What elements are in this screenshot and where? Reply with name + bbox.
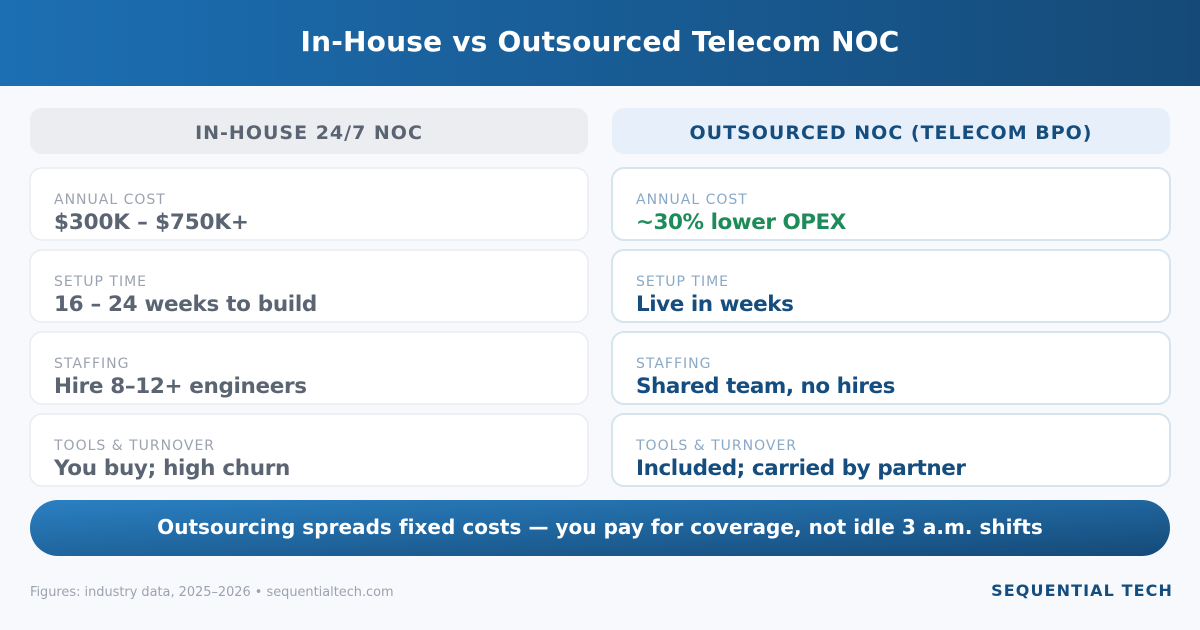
card: outsourced annual cost xyxy=(611,167,1171,241)
card: outsourced staffing: STAFFING xyxy=(636,356,711,372)
title: In-House vs Outsourced Telecom NOC xyxy=(300,25,900,58)
column heading: outsourced: OUTSOURCED NOC (TELECOM BPO) xyxy=(690,122,1092,144)
card: outsourced setup time: Live in weeks xyxy=(636,292,793,317)
card: in-house staffing: STAFFING xyxy=(54,356,129,372)
card: in-house annual cost xyxy=(30,168,588,240)
footer source note: Figures: industry data, 2025–2026 • sequentialtech.com xyxy=(30,585,394,600)
card: in-house tools and turnover: You buy; high churn xyxy=(54,456,290,481)
card: in-house staffing xyxy=(30,332,588,404)
card: outsourced setup time xyxy=(611,249,1171,323)
card: in-house setup time: SETUP TIME xyxy=(54,274,147,290)
card: in-house setup time: 16 – 24 weeks to build xyxy=(54,292,317,317)
card: outsourced staffing xyxy=(611,331,1171,405)
card: outsourced staffing: Shared team, no hires xyxy=(636,374,895,399)
column heading: outsourced xyxy=(612,108,1170,154)
card: in-house annual cost: $300K – $750K+ xyxy=(54,210,249,235)
column heading: in-house: IN-HOUSE 24/7 NOC xyxy=(195,122,423,144)
card: outsourced tools and turnover xyxy=(611,413,1171,487)
card: in-house staffing: Hire 8–12+ engineers xyxy=(54,374,307,399)
card: outsourced tools and turnover: Included; carried by partner xyxy=(636,456,966,481)
card: in-house tools and turnover: TOOLS & TURNOVER xyxy=(54,438,215,454)
header banner xyxy=(0,0,1200,86)
callout banner xyxy=(30,500,1170,556)
card: in-house annual cost: ANNUAL COST xyxy=(54,192,166,208)
card: outsourced setup time: SETUP TIME xyxy=(636,274,729,290)
card: outsourced tools and turnover: TOOLS & TURNOVER xyxy=(636,438,797,454)
column heading: in-house xyxy=(30,108,588,154)
footer brand: SEQUENTIAL TECH xyxy=(991,581,1173,600)
card: in-house setup time xyxy=(30,250,588,322)
card: outsourced annual cost: ANNUAL COST xyxy=(636,192,748,208)
card: in-house tools and turnover xyxy=(30,414,588,486)
callout banner: Outsourcing spreads fixed costs — you pay for coverage, not idle 3 a.m. shifts xyxy=(157,515,1043,539)
card: outsourced annual cost: ~30% lower OPEX xyxy=(636,210,846,235)
